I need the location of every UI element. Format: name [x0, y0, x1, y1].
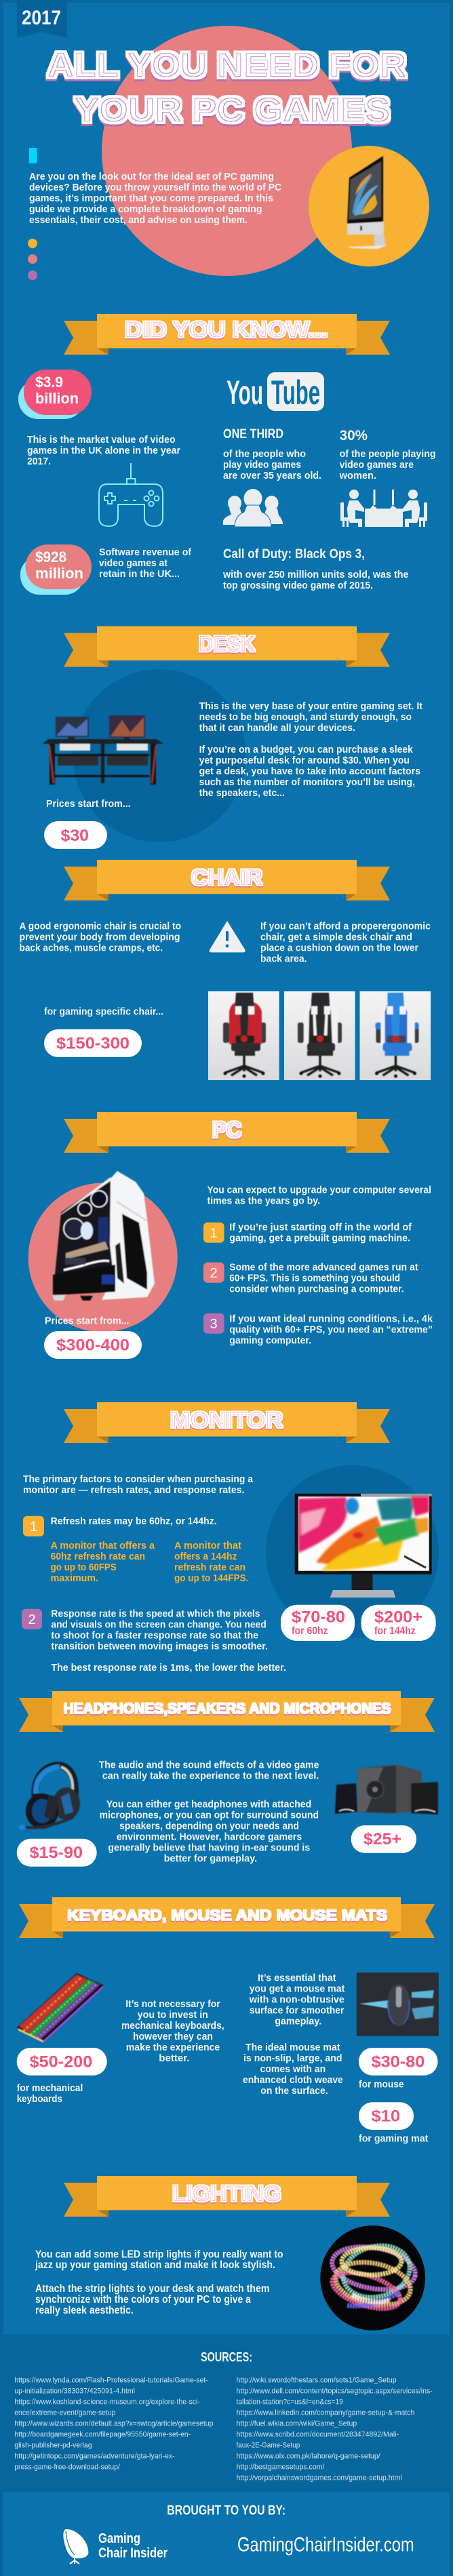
price pill: 25+ — [351, 1825, 416, 1853]
desk description: yet purposeful desk for around $30. When you — [199, 755, 410, 766]
sources list left: up-initialization/383037/425091-4.html — [14, 2387, 135, 2395]
keyboard description — [121, 1998, 224, 2064]
image: gaming headset — [19, 1766, 80, 1830]
pc tip 2 — [203, 1261, 418, 1294]
image: speaker set — [335, 1764, 438, 1815]
icon: YouTube logo: You — [226, 374, 263, 412]
sources list left: glish-publisher-pd-verlag — [14, 2441, 92, 2449]
text: software revenue: retain in the UK... — [99, 568, 180, 580]
pc tip 1: 1 — [210, 1226, 218, 1241]
monitor factor 1 — [23, 1515, 217, 1537]
text: market value: This is the market value of video — [27, 434, 176, 445]
image: led strip lights — [320, 2225, 425, 2331]
pc tip 1 — [203, 1222, 412, 1244]
sources list left: https://www.koshland-science-museum.org/explore-the-sci- — [14, 2398, 200, 2406]
audio description: better for gameplay. — [164, 1852, 257, 1864]
icon: chair logo — [63, 2529, 88, 2564]
pc intro text — [208, 1184, 431, 1206]
mouse mat description: with a non-obtrusive — [249, 1994, 344, 2005]
text: software revenue: video games at — [99, 557, 168, 569]
orange note: 144hz: refresh rate can — [174, 1562, 245, 1573]
keyboard label: keyboards — [17, 2093, 62, 2105]
lighting description — [35, 2248, 283, 2316]
price pill: 200+ for 144hz: $200+ — [374, 1608, 422, 1627]
large pink circle — [102, 26, 352, 276]
price pill: 30-80 — [359, 2048, 438, 2076]
orange note: 144hz: go up to 144FPS. — [174, 1572, 248, 1584]
year ribbon: 2017 — [22, 7, 61, 29]
pc tip 2: consider when purchasing a computer. — [229, 1283, 404, 1294]
monitor factor 1: 1 — [30, 1520, 37, 1534]
pink circle behind pc — [28, 1183, 178, 1332]
audio description: environment. However, hardcore gamers — [117, 1831, 302, 1842]
banner: pc — [64, 1112, 390, 1153]
gaming mat label: for gaming mat — [359, 2133, 428, 2145]
lighting description: Attach the strip lights to your desk and watch them — [35, 2283, 270, 2295]
price pill: 150-300: $150-300 — [56, 1035, 130, 1053]
keyboard description: mechanical keyboards, — [121, 2020, 224, 2032]
price pill: 15-90: $15-90 — [30, 1844, 83, 1862]
sources list right: http://fuel.wikia.com/wiki/Game_Setup — [236, 2419, 357, 2428]
logo wordmark: Chair Insider — [98, 2546, 168, 2561]
mouse mat description: you get a mouse mat — [250, 1983, 344, 1994]
orange circle with desktop computer — [309, 146, 429, 266]
banner: keyboard mouse and mouse mats — [19, 1897, 435, 1938]
audio description — [99, 1759, 319, 1864]
monitor factor 2: and visuals on the screen can change. You need — [51, 1619, 267, 1631]
price pill: 10: $10 — [372, 2107, 400, 2125]
banner: did you know: DID YOU KNOW... — [125, 317, 328, 342]
audio description: microphones, or you can opt for surround sound — [100, 1809, 319, 1821]
stat: one third: play video games — [223, 459, 301, 471]
sources list right: https://www.olx.com.pk/lahore/q-game-setup/ — [236, 2452, 381, 2460]
desk description: that it can handle all your devices. — [199, 722, 355, 734]
mouse label: for mouse — [359, 2079, 404, 2090]
price pill: 50-200 — [17, 2048, 107, 2076]
sources list left — [14, 2376, 213, 2471]
orange note: 60hz: A monitor that offers a — [51, 1540, 155, 1551]
sources list right: https://www.linkedin.com/company/game-setup-&-match — [236, 2409, 414, 2417]
desk prices label: Prices start from... — [46, 798, 131, 810]
text: call of duty: with over 250 million units sold, was the — [222, 569, 408, 580]
desk description: needs to be big enough, and sturdy enough, so — [199, 711, 412, 723]
desk description: If you’re on a budget, you can purchase a sleek — [199, 744, 414, 755]
icon: warning triangle — [210, 922, 245, 952]
sources list left: ence/extreme-event/game-setup — [14, 2409, 115, 2417]
banner: lighting: LIGHTING — [172, 2181, 281, 2206]
chair text right: chair, get a simple desk chair and — [260, 932, 412, 943]
intro paragraph: guide we provide a complete breakdown of gaming — [29, 203, 262, 215]
pc tip 1: gaming, get a prebuilt gaming machine. — [229, 1233, 410, 1244]
banner: keyboard mouse and mouse mats: KEYBOARD, MOUSE AND MOUSE MATS — [67, 1907, 387, 1924]
price pill: 200+ for 144hz — [361, 1605, 436, 1641]
image: gaming mouse on mat — [357, 1973, 439, 2036]
image: blue gaming chair — [359, 991, 431, 1080]
chair text left — [19, 921, 181, 954]
banner: did you know — [64, 314, 390, 355]
monitor factor 2: The best response rate is 1ms, the lower the better. — [51, 1662, 286, 1673]
text: call of duty: top grossing video game of 2015. — [223, 580, 373, 591]
lighting description: You can add some LED strip lights if you really want to — [35, 2248, 283, 2260]
sources heading: SOURCES: — [201, 2350, 252, 2364]
chair text right: place a cushion down on the lower — [260, 943, 418, 954]
stat: 30 percent — [339, 428, 436, 481]
monitor factor 2: Response rate is the speed at which the pixels — [51, 1608, 260, 1620]
orange note: 60hz: go up to 60FPS — [51, 1562, 117, 1573]
orange note: 60hz — [51, 1540, 155, 1584]
sources list right: faux-2E-Game-Setup — [236, 2441, 300, 2449]
intro paragraph: Are you on the look out for the ideal set of PC gaming — [29, 171, 274, 182]
desk description — [199, 700, 422, 799]
banner: desk — [64, 627, 390, 667]
chair text left: prevent your body from developing — [19, 932, 180, 943]
price pill: 50-200: $50-200 — [30, 2053, 92, 2071]
pc tip 2: 60+ FPS. This is something you should — [229, 1272, 400, 1284]
banner: pc: PC — [212, 1117, 241, 1142]
chair text left: back aches, muscle cramps, etc. — [19, 943, 163, 954]
dark circle behind desk — [73, 669, 245, 842]
price pill: 10 — [359, 2102, 414, 2130]
monitor factor 2: to shoot for a faster response rate so that the — [51, 1630, 258, 1642]
lighting description: jazz up your gaming station and make it look stylish. — [35, 2259, 275, 2271]
text: market value: games in the UK alone in the year — [27, 445, 180, 456]
desk description: the speakers, etc... — [199, 787, 285, 799]
monitor factor 2: transition between moving images is smoother. — [51, 1641, 268, 1652]
image: red gaming chair — [208, 991, 279, 1080]
sources list left: press-game-free-download-setup/ — [14, 2463, 121, 2471]
keyboard description: make the experience — [126, 2042, 220, 2053]
image: gaming desk with monitors — [43, 715, 163, 785]
dark circle behind monitor — [266, 1465, 439, 1638]
sources list left: https://www.lynda.com/Flash-Professional-tutorials/Game-set- — [14, 2376, 208, 2384]
pc tip 3: 3 — [210, 1317, 218, 1332]
main title: ALL YOU NEED FOR — [47, 46, 406, 84]
pc tip 3: gaming computer. — [229, 1334, 311, 1346]
price pill: 70-80 for 60hz: $70-80 — [292, 1608, 345, 1627]
chair text right — [260, 921, 431, 965]
intro paragraph: essentials, their cost, and advise on using them. — [29, 214, 248, 226]
sources list left: http://getintopc.com/games/adventure/gta-lyari-ex- — [14, 2452, 175, 2460]
lighting description: synchronize with the colors of your PC to give a — [35, 2294, 251, 2305]
stat: one third — [223, 427, 321, 481]
audio description: You can either get headphones with attached — [106, 1798, 311, 1810]
footer heading: BROUGHT TO YOU BY: — [167, 2503, 285, 2518]
orange note: 144hz: offers a 144hz — [174, 1551, 237, 1562]
pc tip 2: 2 — [210, 1266, 218, 1281]
desk description: such as the number of monitors you’ll be using, — [199, 776, 415, 788]
text: market value — [27, 434, 180, 467]
stat badge: 3.9 billion: billion — [35, 390, 79, 407]
mouse mat description: comes with an — [260, 2063, 326, 2075]
banner: headphones speakers and microphones — [19, 1691, 435, 1732]
icon: game controller — [99, 463, 163, 526]
intro paragraph — [29, 171, 281, 226]
audio description: speakers, depending on your needs and — [119, 1820, 299, 1831]
sources list right: https://www.scribd.com/document/283474892/Mali- — [236, 2430, 399, 2438]
monitor factor 2: 2 — [28, 1612, 36, 1627]
decorative dots — [28, 239, 37, 280]
orange note: 144hz — [174, 1540, 248, 1584]
icon: three people — [223, 489, 283, 527]
icon: YouTube logo — [226, 372, 324, 412]
footer panel — [3, 2492, 450, 2576]
stat badge: 3.9 billion — [18, 370, 92, 419]
price pill: 70-80 for 60hz — [281, 1605, 355, 1641]
text: software revenue: Software revenue of — [99, 547, 192, 558]
price pill: 30 — [44, 821, 107, 849]
main title — [47, 46, 406, 129]
image: gaming pc tower — [52, 1171, 155, 1301]
mouse mat description: The ideal mouse mat — [245, 2042, 340, 2053]
mouse mat description: surface for smoother — [250, 2004, 344, 2016]
price pill: 300-400: $300-400 — [56, 1336, 130, 1355]
price pill: 25+: $25+ — [363, 1830, 401, 1848]
stat badge: 928 million: $928 — [35, 549, 66, 566]
price pill: 70-80 for 60hz: for 60hz — [292, 1625, 328, 1637]
stat: one third: ONE THIRD — [223, 427, 283, 441]
desk description: This is the very base of your entire gaming set. It — [199, 700, 422, 712]
monitor intro text: The primary factors to consider when purchasing a — [23, 1473, 254, 1485]
stat: 30 percent: 30% — [340, 428, 368, 443]
pc tip 3 — [203, 1313, 433, 1346]
stat badge: 3.9 billion: $3.9 — [35, 374, 63, 391]
text: call of duty: Call of Duty: Black Ops 3, — [223, 547, 365, 561]
monitor factor 1: Refresh rates may be 60hz, or 144hz. — [51, 1515, 217, 1527]
keyboard label — [17, 2082, 83, 2105]
price pill: 300-400 — [44, 1331, 142, 1359]
mouse mat description: enhanced cloth weave — [243, 2074, 343, 2086]
orange note: 60hz: maximum. — [51, 1572, 98, 1584]
stat badge: 928 million — [20, 544, 92, 595]
mouse mat description: is non-slip, large, and — [243, 2053, 342, 2064]
image: white gaming chair — [284, 991, 355, 1080]
pc tip 3: quality with 60+ FPS, you need an “extreme” — [229, 1324, 433, 1335]
stat: 30 percent: women. — [339, 470, 376, 481]
banner: lighting — [64, 2176, 390, 2217]
banner: monitor — [64, 1402, 390, 1443]
gaming chair label: for gaming specific chair... — [44, 1006, 163, 1018]
stat badge: 928 million: million — [35, 565, 83, 582]
lighting description: really sleek aesthetic. — [35, 2305, 134, 2316]
sources list right: http://wiki.swordofthestars.com/sots1/Game_Setup — [236, 2376, 397, 2384]
monitor intro text: monitor are — refresh rates, and response rates. — [23, 1484, 244, 1496]
price pill: 150-300 — [44, 1029, 142, 1057]
keyboard description: you to invest in — [138, 2009, 208, 2021]
price pill: 30-80: $30-80 — [372, 2053, 425, 2071]
banner: desk: DESK — [199, 632, 255, 656]
main title: YOUR PC GAMES — [75, 91, 390, 129]
orange note: 144hz: A monitor that — [174, 1540, 241, 1551]
keyboard description: however they can — [133, 2031, 213, 2042]
price pill: 15-90 — [17, 1839, 97, 1867]
desk description: get a desk, you have to take into account factors — [199, 766, 420, 777]
pc intro text: times as the years go by. — [208, 1195, 320, 1206]
monitor factor 2 — [22, 1608, 286, 1673]
intro paragraph: games, it’s important that you come prepared. In this — [29, 193, 273, 204]
chair text right: If you can’t afford a properergonomic — [260, 921, 431, 932]
sources list left: http://www.wizards.com/default.asp?x=swtcg/article/gamesetup — [14, 2419, 213, 2428]
chair text left: A good ergonomic chair is crucial to — [19, 921, 181, 932]
audio description: The audio and the sound effects of a video game — [99, 1759, 319, 1770]
image: rgb mechanical keyboard — [17, 1973, 104, 2042]
pc tip 1: If you’re just starting off in the world of — [229, 1222, 412, 1233]
sources list right: http://www.dell.com/content/topics/segtopic.aspx/services/ins- — [236, 2387, 433, 2395]
keyboard description: better. — [159, 2053, 190, 2064]
chair text right: back area. — [260, 953, 307, 965]
keyboard description: It’s not necessary for — [125, 1998, 220, 2010]
intro paragraph: devices? Before you throw yourself into the world of PC — [29, 182, 281, 193]
banner: chair — [64, 860, 390, 900]
icon: YouTube logo: Tube — [271, 374, 320, 412]
mouse mat description: gameplay. — [275, 2015, 321, 2027]
year ribbon — [17, 0, 67, 38]
mouse mat description: on the surface. — [260, 2085, 328, 2097]
banner: chair: CHAIR — [191, 865, 262, 890]
mouse mat description — [243, 1972, 344, 2097]
sources list right — [236, 2376, 433, 2482]
sources list right: http://vorpalchainswordgames.com/game-setup.html — [236, 2474, 402, 2482]
banner: monitor: MONITOR — [170, 1408, 283, 1432]
text: market value: 2017. — [27, 456, 51, 467]
pc tip 3: If you want ideal running conditions, i.e., 4k — [229, 1313, 433, 1324]
price pill: 200+ for 144hz: for 144hz — [374, 1625, 416, 1637]
price pill: 30: $30 — [61, 827, 89, 845]
text: call of duty — [222, 547, 408, 591]
mouse mat description: It’s essential that — [258, 1972, 336, 1983]
logo wordmark: Gaming — [98, 2531, 140, 2546]
monitor intro text — [23, 1473, 254, 1496]
audio description: can really take the experience to the next level. — [102, 1770, 319, 1781]
sources list right: tallation-station?c=us&l=en&cs=19 — [236, 2398, 343, 2406]
pc intro text: You can expect to upgrade your computer several — [208, 1184, 431, 1195]
stat: one third: are over 35 years old. — [223, 470, 321, 481]
stat: 30 percent: video games are — [340, 459, 414, 471]
logo wordmark — [98, 2531, 168, 2561]
pc tip 2: Some of the more advanced games run at — [229, 1261, 418, 1273]
sources list left: http://boardgamegeek.com/filepage/95550/game-set-en- — [14, 2430, 191, 2438]
banner: headphones speakers and microphones: HEADPHONES,SPEAKERS AND MICROPHONES — [64, 1700, 391, 1717]
stat: 30 percent: of the people playing — [340, 448, 436, 460]
text: software revenue — [99, 547, 192, 580]
audio description: generally believe that having in-ear sound is — [108, 1842, 310, 1853]
stat: one third: of the people who — [223, 448, 306, 460]
orange note: 60hz: 60hz refresh rate can — [51, 1551, 145, 1562]
keyboard label: for mechanical — [17, 2082, 83, 2094]
sources list right: http://bestgamesetups.com/ — [236, 2463, 325, 2471]
pc prices label: Prices start from... — [45, 1315, 129, 1327]
icon: two gamers at table — [340, 490, 427, 527]
image: monitor with colorful screen — [295, 1494, 432, 1598]
cyan accent bar — [29, 148, 37, 163]
